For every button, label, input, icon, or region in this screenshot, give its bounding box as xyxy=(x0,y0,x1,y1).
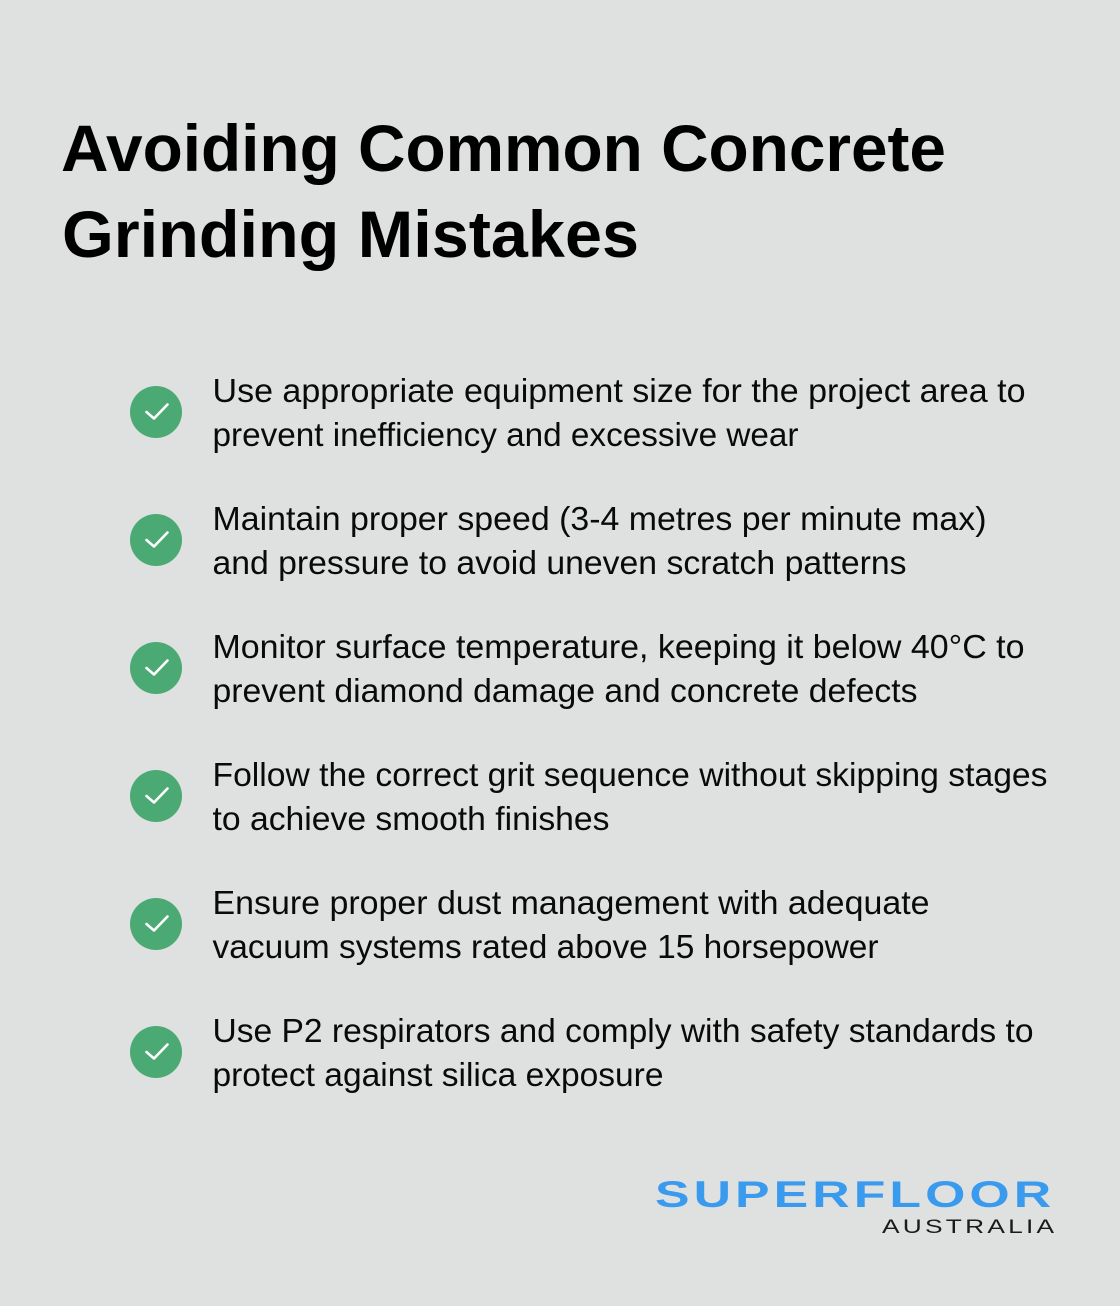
item 6: respirators: protect against silica exposure xyxy=(212,1056,664,1093)
item 3: surface temperature: Monitor surface temperature, keeping it below 40°C to xyxy=(212,628,1024,665)
item 5: dust management xyxy=(130,884,930,965)
item 5: dust management: vacuum systems rated above 15 horsepower xyxy=(212,928,879,965)
item 3: surface temperature xyxy=(130,628,1024,709)
title: Avoiding Common Concrete xyxy=(61,111,946,185)
item 1: equipment size xyxy=(130,372,1026,453)
logo: Superfloor Australia: SUPERFLOOR xyxy=(655,1173,1051,1215)
item 3: surface temperature: prevent diamond damage and concrete defects xyxy=(212,672,918,709)
item 6: respirators xyxy=(130,1012,1034,1093)
item 2: speed and pressure: Maintain proper speed (3-4 metres per minute max) xyxy=(212,500,986,537)
item 1: equipment size: prevent inefficiency and excessive wear xyxy=(212,416,799,453)
logo: Superfloor Australia xyxy=(655,1173,1055,1237)
item 4: grit sequence xyxy=(130,756,1048,837)
checklist xyxy=(130,372,1048,1093)
item 5: dust management: Ensure proper dust management with adequate xyxy=(212,884,930,921)
item 4: grit sequence: Follow the correct grit sequence without skipping stages xyxy=(212,756,1048,793)
logo: Superfloor Australia: AUSTRALIA xyxy=(882,1215,1055,1237)
item 2: speed and pressure: and pressure to avoid uneven scratch patterns xyxy=(212,544,906,581)
item 1: equipment size: Use appropriate equipment size for the project area to xyxy=(212,372,1026,409)
item 4: grit sequence: to achieve smooth finishes xyxy=(212,800,610,837)
item 2: speed and pressure xyxy=(130,500,986,581)
title: Grinding Mistakes xyxy=(62,197,639,271)
item 6: respirators: Use P2 respirators and comply with safety standards to xyxy=(212,1012,1034,1049)
title xyxy=(61,111,946,271)
